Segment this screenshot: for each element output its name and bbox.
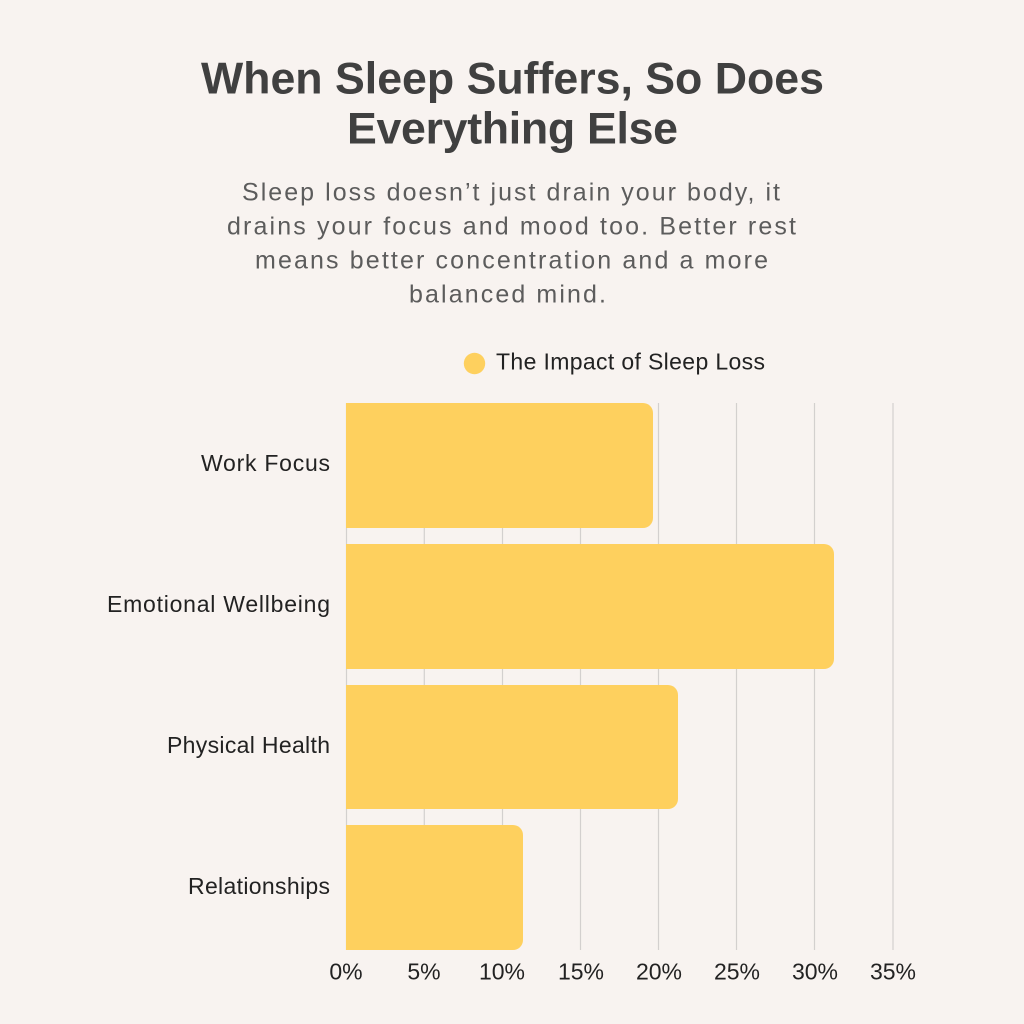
x axis labels: 0% [329,958,363,984]
legend label: The Impact of Sleep Loss [496,348,765,374]
category labels [107,450,330,899]
x axis labels: 30% [792,958,838,984]
bar: Physical Health [346,685,678,809]
legend [464,348,765,374]
x axis labels: 10% [479,958,525,984]
legend swatch [464,353,485,374]
title: When Sleep Suffers, So Does [201,54,824,104]
subtitle text block [227,178,796,308]
subtitle text block: means better concentration and a more [255,246,768,274]
bar: Work Focus [346,403,653,528]
category labels: Physical Health [167,732,330,758]
x axis labels: 20% [636,958,682,984]
bars [346,403,834,950]
subtitle text block: balanced mind. [409,280,606,308]
x axis labels [329,958,916,984]
bar: Emotional Wellbeing [346,544,834,669]
category labels: Work Focus [201,450,330,476]
title [201,54,824,154]
x axis labels: 15% [558,958,604,984]
subtitle text block: Sleep loss doesn’t just drain your body, it [242,178,780,206]
bar chart [107,403,916,984]
x axis labels: 5% [407,958,441,984]
bar: Relationships [346,825,523,950]
x axis labels: 25% [714,958,760,984]
category labels: Relationships [188,873,330,899]
category labels: Emotional Wellbeing [107,591,330,617]
subtitle text block: drains your focus and mood too. Better rest [227,212,796,240]
title: Everything Else [347,104,678,154]
x axis labels: 35% [870,958,916,984]
